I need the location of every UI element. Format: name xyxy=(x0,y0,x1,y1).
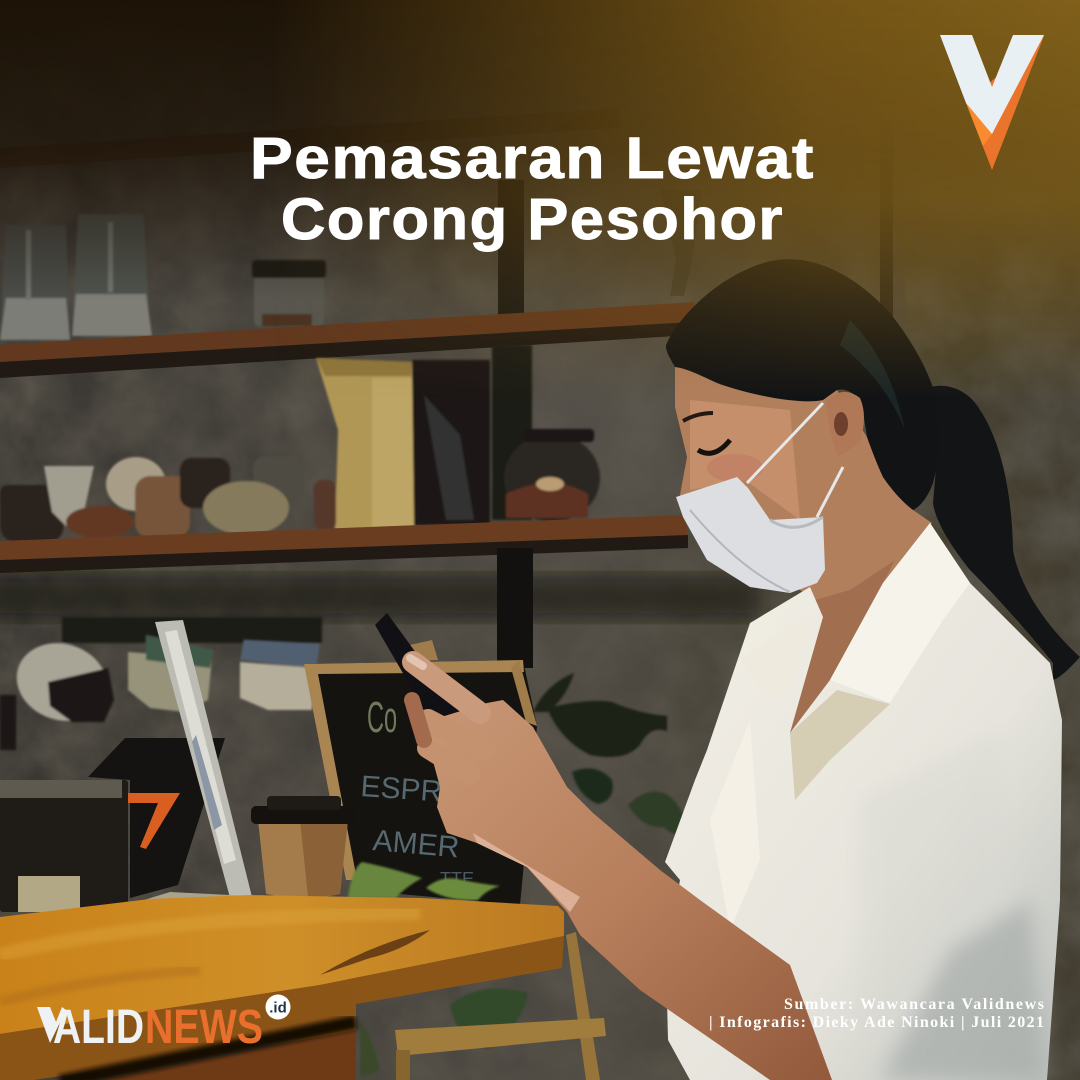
plant behind the board xyxy=(533,673,688,834)
middle shelf with ceramics, coffee bag and jar xyxy=(0,345,688,668)
ear xyxy=(826,392,864,456)
table plant xyxy=(348,862,528,1078)
chalkboard menu: TTE xyxy=(440,869,474,889)
takeaway coffee cup xyxy=(251,796,355,898)
forearm and hand xyxy=(415,700,832,1080)
wooden table xyxy=(0,895,606,1080)
chalkboard menu: Co xyxy=(367,693,397,742)
source credit: Sumber: Wawancara Validnews xyxy=(784,996,1044,1013)
chalkboard menu: ESPR xyxy=(360,770,443,809)
eyebrow xyxy=(683,413,713,421)
title: Pemasaran Lewat xyxy=(250,126,815,191)
hanging mugs xyxy=(0,617,322,750)
top gradient overlay xyxy=(0,0,1080,400)
upper shelf with glasses and jar xyxy=(0,180,702,378)
phone xyxy=(375,613,467,737)
chalkboard menu: AMER xyxy=(371,824,461,865)
source credit: | Infografis: Dieky Ade Ninoki | Juli 2021 xyxy=(709,1014,1044,1031)
logo: V mark xyxy=(940,35,1044,170)
till machine and menu stand xyxy=(0,620,252,912)
shirt xyxy=(665,523,1062,1080)
woman with mask using phone xyxy=(375,259,1080,1080)
logo: VALIDNEWS.id: .id xyxy=(269,1000,287,1016)
title xyxy=(250,126,815,252)
fingers xyxy=(413,662,480,713)
logo: VALIDNEWS.id: ALID xyxy=(53,1001,144,1054)
thumb xyxy=(473,833,580,912)
ear and neck skin xyxy=(675,367,932,733)
logo: VALIDNEWS.id xyxy=(37,994,290,1054)
eye xyxy=(698,440,730,453)
source credit xyxy=(709,996,1044,1031)
hair xyxy=(666,259,938,510)
title: Corong Pesohor xyxy=(281,187,784,252)
chalkboard menu xyxy=(304,640,537,905)
logo: VALIDNEWS.id: NEWS xyxy=(145,1001,263,1054)
mask xyxy=(676,477,825,593)
ponytail xyxy=(930,386,1080,680)
